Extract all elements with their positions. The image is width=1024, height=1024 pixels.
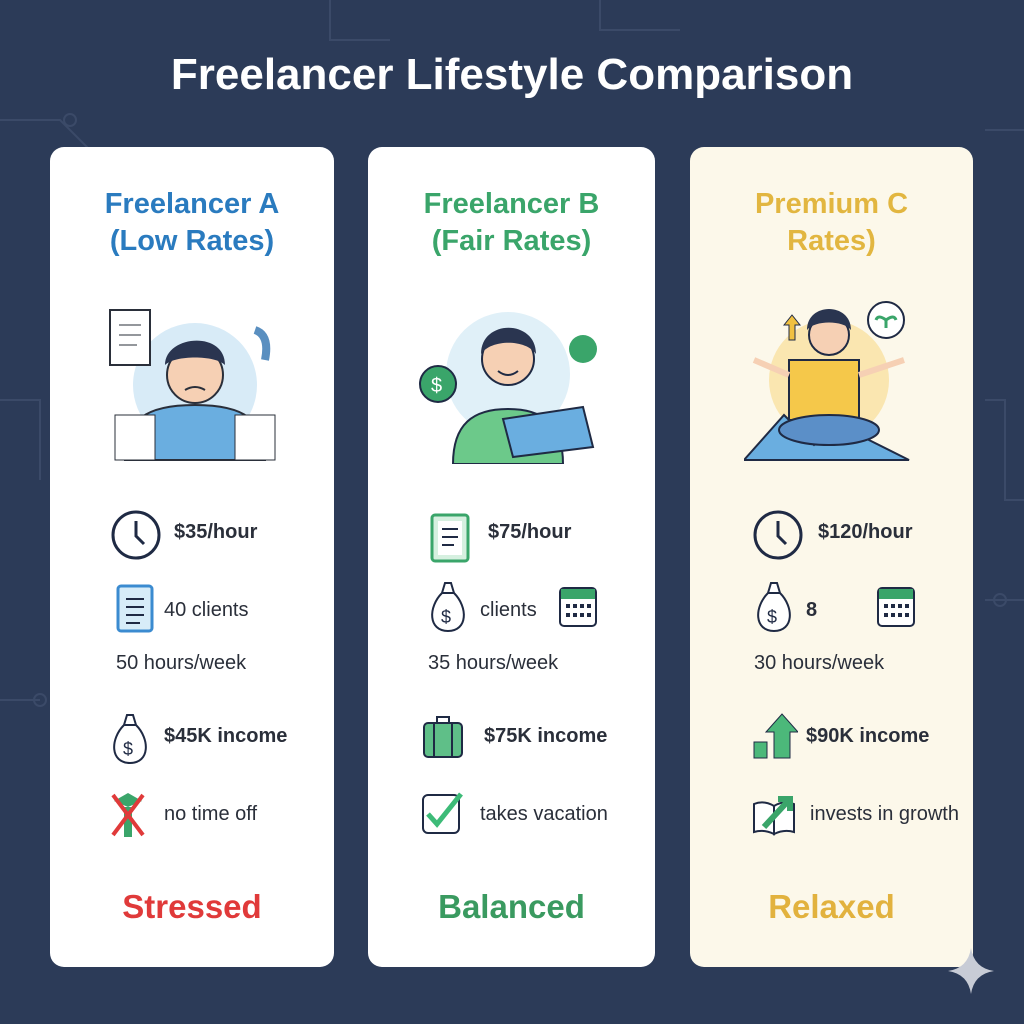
heading B [424, 188, 599, 257]
row: clients [757, 582, 791, 632]
row: rate [112, 510, 160, 560]
panel: Freelancer B: takes vacation [480, 803, 608, 825]
heading A: Freelancer A [105, 188, 279, 220]
panel: Freelancer B: clients [480, 599, 537, 621]
row: income [754, 713, 798, 758]
panel: Premium C: 8 [806, 599, 817, 621]
heading A [105, 188, 279, 257]
panel: Premium C: $120/hour [818, 521, 912, 543]
heading C: Rates) [787, 225, 876, 257]
row: growth [753, 796, 795, 836]
panel: Freelancer B: $75K income [484, 725, 607, 747]
row: vacation [422, 792, 463, 834]
row: hours: 50 hours/week [116, 652, 246, 674]
panel: Freelancer B [368, 147, 655, 967]
illustration: balanced person with laptop [419, 312, 597, 464]
panel: Freelancer A: $45K income [164, 725, 287, 747]
row: hours: 30 hours/week [754, 652, 884, 674]
row: clients [431, 582, 465, 632]
icon: sparkle [948, 948, 994, 994]
panel: Freelancer A: no time off [164, 803, 257, 825]
panel: Freelancer B: $75/hour [488, 521, 571, 543]
illustration: balanced person with laptop: $ [431, 375, 442, 397]
illustration: meditating person [744, 301, 910, 461]
icon: calendar [559, 587, 597, 627]
row: income [113, 714, 147, 764]
row: no time off [112, 793, 144, 837]
row: income: $ [123, 739, 133, 759]
illustration: stressed person [109, 309, 276, 461]
panel: Freelancer A [50, 147, 334, 967]
row: hours: 35 hours/week [428, 652, 558, 674]
heading C: Premium C [755, 188, 908, 220]
panel: Premium C: $90K income [806, 725, 929, 747]
heading C [755, 188, 908, 257]
row: rate [430, 514, 470, 562]
status A: Stressed [122, 888, 262, 925]
status B: Balanced [438, 888, 585, 925]
row: clients [116, 584, 154, 632]
icon: calendar [877, 587, 915, 627]
row: income [423, 716, 463, 758]
panel: Freelancer A: $35/hour [174, 521, 257, 543]
panel: Premium C: invests in growth [810, 803, 959, 825]
title: Freelancer Lifestyle Comparison [171, 50, 853, 99]
heading B: Freelancer B [424, 188, 599, 220]
panel: Freelancer A: 40 clients [164, 599, 248, 621]
row: clients: $ [767, 607, 777, 627]
row: rate [754, 510, 802, 560]
status C: Relaxed [768, 888, 895, 925]
heading A: (Low Rates) [110, 225, 274, 257]
row: clients: $ [441, 607, 451, 627]
heading B: (Fair Rates) [432, 225, 591, 257]
panel: Premium C [690, 147, 973, 967]
